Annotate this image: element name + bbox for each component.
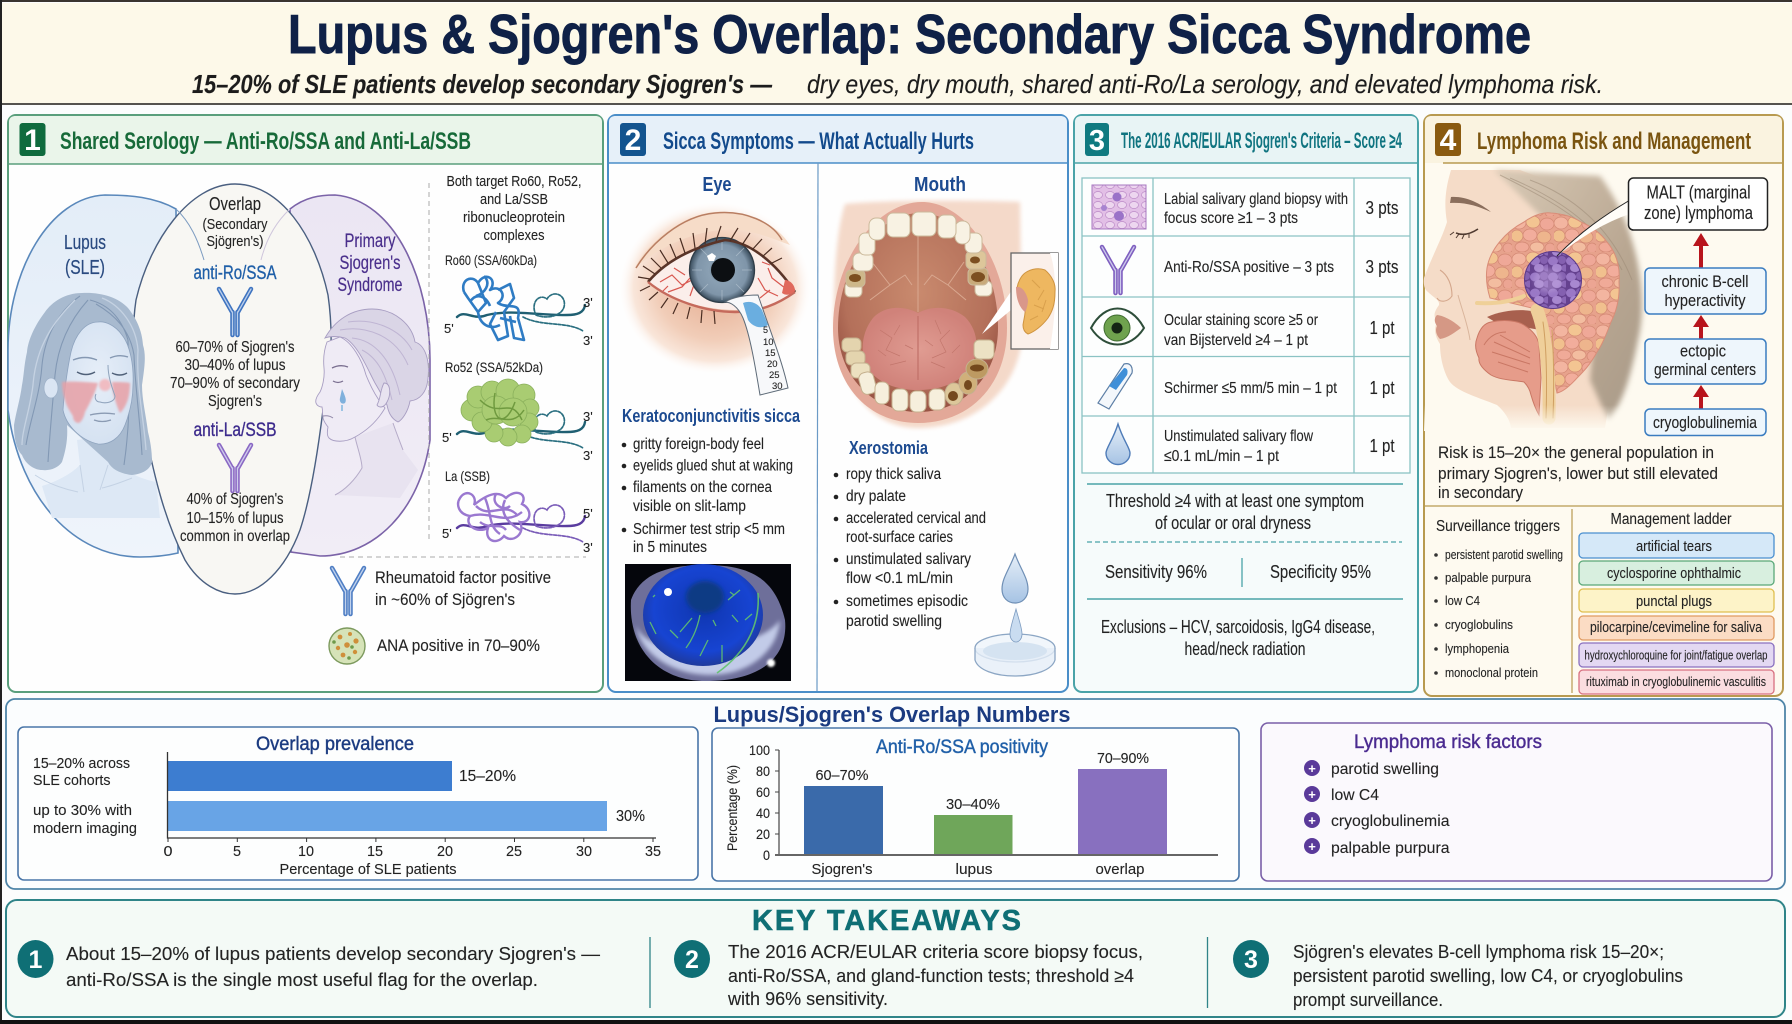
box: ectopic germinal centers — [1645, 339, 1766, 384]
takeaway 2: with 96% sensitivity. — [727, 989, 888, 1009]
step: pilocarpine — [1579, 616, 1774, 640]
heading 3: The 2016 ACR/EULAR Sjogren's Criteria – Score ≥4 — [1121, 128, 1402, 153]
surveillance triggers: lymphopenia — [1445, 641, 1510, 656]
chart: overlap prevalence: 15 — [367, 843, 383, 860]
keratoconjunctivitis list: Schirmer test strip <5 mm — [633, 521, 785, 538]
salivary duct — [1477, 296, 1554, 418]
anti-Ro block: 70–90% of secondary — [170, 375, 300, 392]
salivary gland inset — [982, 253, 1058, 349]
takeaway 1 — [18, 940, 600, 990]
anti-Ro block: anti-Ro/SSA — [194, 263, 277, 284]
row: Schirmer — [1098, 364, 1394, 409]
keratoconjunctivitis list: visible on slit-lamp — [633, 498, 746, 515]
takeaway 1: 1 — [29, 946, 43, 974]
chart: overlap prevalence: 20 — [437, 843, 453, 860]
exclusions: Exclusions – HCV, sarcoidosis, IgG4 disease, — [1101, 617, 1375, 637]
panel: key takeaways — [6, 900, 1785, 1017]
lupus label — [64, 232, 106, 279]
protein La: 5' — [583, 506, 593, 521]
risk statement — [1438, 443, 1718, 502]
rheumatoid factor item: in ~60% of Sjögren's — [375, 590, 515, 609]
ribonucleoprotein note — [446, 173, 582, 244]
box: cryoglobulinemia: cryoglobulinemia — [1653, 413, 1757, 432]
chart: anti-Ro/SSA positivity: Percentage (%) — [725, 765, 740, 851]
chart: anti-Ro/SSA positivity: 100 — [749, 742, 770, 758]
takeaway 1: anti-Ro/SSA is the single most useful flag for the overlap. — [66, 970, 538, 990]
row: anti-Ro: Anti-Ro/SSA positive – 3 pts — [1164, 259, 1334, 276]
overlap label — [202, 194, 268, 250]
threshold text: of ocular or oral dryness — [1155, 513, 1311, 533]
row: ocular: van Bijsterveld ≥4 – 1 pt — [1164, 332, 1308, 349]
step: cyclosporine — [1579, 561, 1774, 585]
takeaway 3: 3 — [1244, 946, 1258, 974]
management ladder: Management ladder — [1610, 511, 1732, 528]
anti-La block — [180, 420, 290, 545]
xerostomia list: unstimulated salivary — [846, 551, 971, 568]
sensitivity and specificity — [1105, 558, 1371, 587]
keratoconjunctivitis list: gritty foreign-body feel — [633, 436, 764, 453]
lupus circle — [8, 195, 178, 557]
risk factor: cryoglobulinemia: cryoglobulinemia — [1331, 813, 1450, 830]
schirmer strip: 15 — [765, 348, 776, 359]
schirmer strip: 25 — [769, 370, 780, 381]
chart: anti-Ro/SSA positivity: 60–70% — [816, 767, 868, 784]
schirmer strip: 30 — [772, 381, 783, 392]
threshold text: Threshold ≥4 with at least one symptom — [1106, 491, 1364, 511]
step: artificial tears: artificial tears — [1636, 538, 1712, 555]
row: salivary flow: ≤0.1 mL/min – 1 pt — [1164, 448, 1279, 465]
chart: overlap prevalence — [18, 727, 698, 880]
badge 2: 2 — [625, 124, 641, 157]
lupus label: (SLE) — [65, 257, 105, 279]
takeaway 2 — [674, 940, 1143, 1009]
chart: overlap prevalence: 15–20% across — [33, 755, 130, 772]
panel 1: shared serology — [8, 115, 603, 692]
protein Ro60: 3' — [583, 295, 593, 310]
ANA item: ANA positive in 70–90% — [377, 636, 540, 655]
sensitivity and specificity: Sensitivity 96% — [1105, 562, 1207, 582]
rheumatoid factor item: Rheumatoid factor positive — [375, 568, 551, 587]
xerostomia list: parotid swelling — [846, 613, 942, 630]
takeaway 2: 2 — [685, 946, 699, 974]
surveillance triggers: monoclonal protein — [1445, 665, 1538, 680]
step: punctal plugs: punctal plugs — [1636, 593, 1712, 610]
xerostomia list: flow <0.1 mL/min — [846, 570, 953, 587]
protein Ro52: 3' — [583, 448, 593, 463]
risk factor: low C4 — [1304, 786, 1379, 804]
row: salivary flow: Unstimulated salivary flow — [1164, 428, 1313, 445]
surveillance triggers — [1434, 518, 1563, 680]
chart: overlap prevalence: 30% — [616, 808, 645, 825]
chart: anti-Ro/SSA positivity: overlap — [1096, 861, 1144, 878]
anti-Ro block: 30–40% of lupus — [184, 357, 286, 374]
protein Ro60 — [444, 252, 593, 348]
chart: anti-Ro/SSA positivity: Sjogren's — [812, 861, 872, 878]
row: biopsy: 3 pts — [1366, 198, 1398, 218]
lupus label: Lupus — [64, 232, 106, 254]
row: ocular: Ocular staining score ≥5 or — [1164, 312, 1319, 329]
panel 3: ACR/EULAR criteria — [1074, 115, 1418, 692]
chart: overlap prevalence: 10 — [298, 843, 314, 860]
step: punctal plugs — [1579, 589, 1774, 612]
keratoconjunctivitis list: Keratoconjunctivitis sicca — [622, 406, 801, 426]
takeaway 3: prompt surveillance. — [1293, 990, 1443, 1010]
ribonucleoprotein note: ribonucleoprotein — [463, 209, 565, 226]
takeaway 3: Sjögren's elevates B-cell lymphoma risk 15–20×; — [1293, 942, 1664, 962]
row: salivary flow — [1106, 424, 1394, 465]
risk statement: in secondary — [1438, 483, 1523, 502]
callout: MALT lymphoma — [1557, 178, 1768, 256]
callout: MALT lymphoma: zone) lymphoma — [1644, 203, 1754, 223]
anti-Ro block: 60–70% of Sjogren's — [176, 339, 295, 356]
schirmer strip: 20 — [767, 359, 778, 370]
primary label — [338, 231, 402, 296]
badge 3 — [1085, 123, 1109, 157]
schirmer strip: 5 — [763, 325, 768, 335]
badge 1: 1 — [24, 124, 41, 157]
xerostomia list: accelerated cervical and — [846, 510, 986, 527]
panel: overlap numbers — [6, 699, 1785, 889]
step: cyclosporine: cyclosporine ophthalmic — [1607, 565, 1741, 582]
badge 3: 3 — [1089, 125, 1105, 157]
keratoconjunctivitis list: in 5 minutes — [633, 539, 707, 556]
anti-La block: common in overlap — [180, 528, 290, 545]
parotid gland — [1486, 213, 1619, 393]
ribonucleoprotein note: Both target Ro60, Ro52, — [446, 173, 582, 190]
protein Ro52: Ro52 (SSA/52kDa) — [445, 359, 543, 375]
protein Ro52: 3' — [583, 409, 593, 424]
keratoconjunctivitis list: eyelids glued shut at waking — [633, 458, 793, 474]
venn diagram — [8, 184, 430, 594]
protein La: 5' — [442, 526, 452, 541]
box: chronic B-cell: hyperactivity — [1664, 291, 1746, 310]
risk factor: parotid swelling: + — [1308, 761, 1316, 776]
xerostomia list: Xerostomia — [849, 438, 929, 458]
badge 4: 4 — [1440, 124, 1457, 157]
xerostomia list: root-surface caries — [846, 529, 953, 546]
row: biopsy: Labial salivary gland biopsy with — [1164, 191, 1348, 208]
chart: anti-Ro/SSA positivity: 40 — [756, 805, 770, 821]
row: ocular — [1091, 308, 1394, 349]
ribonucleoprotein note: complexes — [484, 227, 544, 244]
chart: overlap prevalence: modern imaging — [33, 820, 137, 837]
risk factor: low C4: + — [1308, 787, 1316, 802]
oral mucosa — [1487, 310, 1540, 330]
header band — [2, 3, 1792, 105]
badge 2 — [620, 123, 646, 157]
row: Schirmer: Schirmer ≤5 mm/5 min – 1 pt — [1164, 380, 1337, 397]
lower teeth — [842, 338, 994, 412]
anti-Ro block: Sjogren's — [208, 393, 262, 410]
schirmer strip — [725, 295, 788, 395]
badge 1 — [20, 123, 46, 157]
overlap region — [133, 184, 331, 594]
anti-La block: anti-La/SSB — [194, 420, 276, 441]
lymphoma mass — [1524, 252, 1582, 308]
protein La: 3' — [583, 540, 593, 555]
chart: anti-Ro/SSA positivity: 60 — [756, 784, 770, 800]
subtitle: dry eyes, dry mouth, shared anti-Ro/La serology, and elevated lymphoma risk. — [807, 69, 1603, 99]
badge 4 — [1435, 123, 1461, 157]
fluorescein stained cornea photo — [625, 564, 791, 681]
protein Ro52 — [442, 359, 593, 463]
box: cryoglobulinemia — [1645, 409, 1766, 436]
title: Lupus & Sjogren's Overlap: Secondary Sicca Syndrome — [288, 3, 1531, 65]
primary profile illustration — [316, 309, 428, 498]
ANA item — [329, 628, 540, 664]
mouth heading: Mouth — [914, 174, 966, 196]
lymphoma risk factors box — [1261, 723, 1772, 881]
anti-Ro block — [170, 263, 300, 410]
risk factor: palpable purpura: + — [1308, 839, 1316, 854]
protein Ro60: 5' — [444, 321, 454, 336]
arrow: cryoglobulinemia to germinal centers — [1693, 385, 1709, 409]
chart: overlap prevalence: 15–20% — [459, 768, 516, 785]
tongue — [863, 308, 976, 390]
panel 4: lymphoma risk and management — [1424, 115, 1783, 696]
sensitivity and specificity: Specificity 95% — [1270, 562, 1371, 582]
panel 2: sicca symptoms — [608, 115, 1068, 692]
arrow: hyperactivity to lymphoma — [1693, 233, 1709, 268]
chart: overlap prevalence: 0 — [164, 843, 172, 860]
protein Ro52: 5' — [442, 430, 452, 445]
icon: saliva drop and dish — [975, 554, 1055, 676]
row: anti-Ro — [1102, 247, 1398, 293]
protein Ro60: Ro60 (SSA/60kDa) — [445, 252, 537, 268]
primary circle — [290, 195, 430, 556]
step: hydroxychloroquine — [1579, 643, 1774, 667]
protein La — [442, 468, 593, 555]
risk statement: Risk is 15–20× the general population in — [1438, 443, 1714, 462]
threshold text — [1106, 491, 1364, 533]
surveillance triggers: cryoglobulins — [1445, 617, 1513, 632]
xerostomia list: dry palate — [846, 488, 906, 505]
box: chronic B-cell: chronic B-cell — [1662, 272, 1748, 291]
step: rituximab — [1579, 670, 1774, 694]
chart: overlap prevalence: up to 30% with — [33, 802, 132, 819]
chart: overlap prevalence: 25 — [506, 843, 522, 860]
box: ectopic germinal centers: ectopic — [1680, 342, 1726, 360]
upper teeth — [845, 212, 992, 297]
risk factor: parotid swelling: parotid swelling — [1331, 761, 1439, 778]
surveillance triggers: persistent parotid swelling — [1445, 547, 1563, 562]
chart: anti-Ro/SSA positivity: 30–40% — [946, 796, 1000, 813]
anatomical head illustration — [1424, 170, 1646, 431]
step: artificial tears — [1579, 533, 1774, 558]
exclusions: head/neck radiation — [1184, 639, 1306, 659]
chart: anti-Ro/SSA positivity: 0 — [763, 847, 770, 863]
chart: overlap prevalence: 35 — [645, 843, 661, 860]
chart: overlap prevalence: SLE cohorts — [33, 772, 110, 789]
row: biopsy — [1092, 185, 1398, 229]
chart: anti-Ro/SSA positivity: lupus — [956, 861, 992, 878]
ribonucleoprotein note: and La/SSB — [480, 191, 548, 208]
chart: anti-Ro/SSA positivity: 70–90% — [1097, 750, 1149, 767]
chart: anti-Ro/SSA positivity: 20 — [756, 826, 770, 842]
row: Schirmer: 1 pt — [1370, 378, 1394, 398]
row: salivary flow: 1 pt — [1370, 436, 1394, 456]
chart: overlap prevalence: 30 — [576, 843, 592, 860]
row: ocular: 1 pt — [1370, 318, 1394, 338]
chart: anti-Ro/SSA positivity: Anti-Ro/SSA positivity — [876, 737, 1048, 758]
chart: overlap prevalence: 5 — [233, 843, 241, 860]
risk factor: cryoglobulinemia: + — [1308, 813, 1316, 828]
surveillance triggers: palpable purpura — [1445, 570, 1532, 585]
criteria table — [1082, 178, 1410, 473]
row: biopsy: focus score ≥1 – 3 pts — [1164, 210, 1298, 227]
takeaway 1: About 15–20% of lupus patients develop secondary Sjogren's — — [66, 944, 600, 964]
eye illustration — [619, 202, 811, 395]
overlap label: Sjögren's) — [206, 233, 264, 250]
risk factor: palpable purpura: palpable purpura — [1331, 840, 1450, 857]
chart: anti-Ro/SSA positivity — [712, 728, 1239, 881]
lips — [1435, 315, 1461, 339]
surveillance triggers: Surveillance triggers — [1436, 518, 1560, 535]
chart: overlap prevalence: Overlap prevalence — [256, 734, 414, 755]
lupus face illustration — [14, 293, 160, 518]
subtitle: 15–20% of SLE patients develop secondary Sjogren's — — [192, 69, 773, 99]
primary label: Primary — [344, 231, 396, 252]
subtitle — [192, 69, 1603, 99]
overlap label: (Secondary — [202, 216, 268, 233]
box: ectopic germinal centers: germinal centers — [1654, 360, 1756, 379]
anti-La block: 40% of Sjogren's — [186, 491, 284, 508]
chart: overlap prevalence: Percentage of SLE patients — [280, 861, 456, 878]
primary label: Syndrome — [338, 275, 402, 296]
surveillance triggers: low C4 — [1445, 593, 1480, 608]
takeaways heading: KEY TAKEAWAYS — [752, 905, 1021, 937]
protein La: La (SSB) — [445, 468, 490, 484]
primary label: Sjogren's — [340, 253, 400, 274]
rheumatoid factor item — [332, 568, 551, 614]
row: anti-Ro: 3 pts — [1366, 257, 1398, 277]
numbers heading: Lupus/Sjogren's Overlap Numbers — [714, 702, 1070, 727]
risk factor: low C4: low C4 — [1331, 787, 1379, 804]
box: chronic B-cell — [1645, 268, 1766, 314]
takeaway 3 — [1233, 940, 1683, 1010]
takeaway 3: persistent parotid swelling, low C4, or cryoglobulins — [1293, 966, 1683, 986]
schirmer strip: 10 — [763, 337, 774, 348]
risk statement: primary Sjogren's, lower but still elevated — [1438, 464, 1718, 483]
xerostomia list: ropy thick saliva — [846, 466, 941, 483]
overlap label: Overlap — [209, 194, 261, 214]
callout: MALT lymphoma: MALT (marginal — [1646, 182, 1750, 202]
takeaway 2: The 2016 ACR/EULAR criteria score biopsy focus, — [728, 942, 1143, 962]
heading 1: Shared Serology — Anti-Ro/SSA and Anti-La/SSB — [60, 128, 471, 155]
lymphoma risk factors box: Lymphoma risk factors — [1354, 732, 1542, 753]
mouth illustration — [833, 201, 1058, 428]
keratoconjunctivitis list — [622, 406, 801, 556]
xerostomia list — [834, 438, 986, 630]
arrow: germinal centers to hyperactivity — [1693, 315, 1709, 339]
eye heading: Eye — [702, 174, 732, 196]
keratoconjunctivitis list: filaments on the cornea — [633, 479, 772, 496]
chart: anti-Ro/SSA positivity: 80 — [756, 763, 770, 779]
anti-La block: 10–15% of lupus — [186, 510, 284, 527]
xerostomia list: sometimes episodic — [846, 593, 968, 610]
takeaway 2: anti-Ro/SSA, and gland-function tests; threshold ≥4 — [728, 966, 1134, 986]
heading 2: Sicca Symptoms — What Actually Hurts — [663, 128, 974, 155]
management ladder — [1579, 511, 1774, 694]
exclusions — [1101, 617, 1375, 659]
protein Ro60: 3' — [583, 333, 593, 348]
